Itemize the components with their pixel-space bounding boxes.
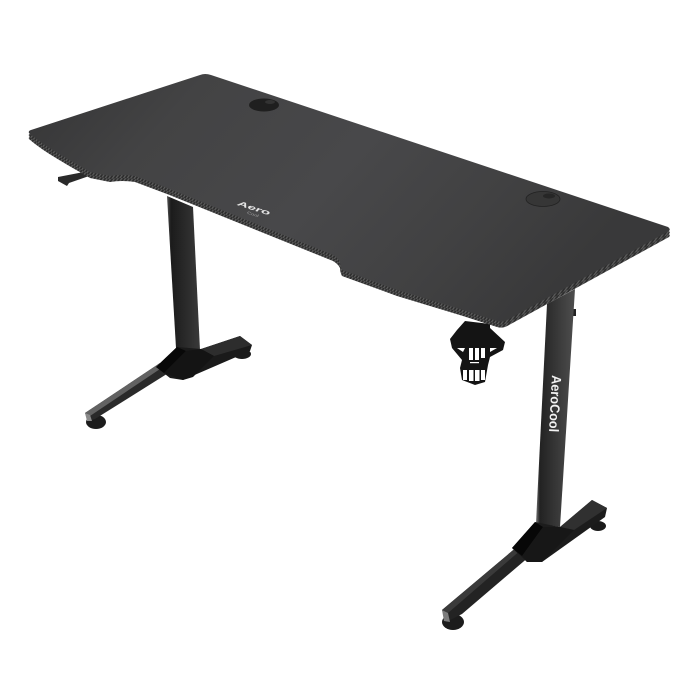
adjustment handle — [58, 171, 92, 186]
left rear foot pad — [233, 349, 251, 359]
carbon fibre edge — [29, 77, 670, 328]
cup holder gaps — [457, 348, 497, 381]
left upright column — [167, 196, 200, 350]
top surface — [29, 74, 670, 322]
cup holder — [450, 321, 505, 385]
right base rod — [442, 546, 530, 622]
right rear foot pad — [590, 521, 606, 531]
left base rod — [85, 363, 170, 421]
right cable grommet — [526, 192, 560, 206]
left front foot pad — [86, 415, 106, 429]
desk top — [29, 74, 670, 328]
right base housing — [512, 500, 607, 562]
leg brand label: AeroCool — [546, 375, 564, 433]
desk logo: Cool — [247, 211, 260, 218]
desk logo — [233, 200, 272, 222]
left leg and base — [85, 196, 252, 429]
right leg and base — [442, 289, 607, 630]
desk logo: Aero — [234, 200, 272, 218]
left cable grommet — [249, 98, 279, 112]
height button — [573, 309, 576, 316]
right front foot pad — [442, 614, 464, 630]
right upright column — [536, 289, 575, 527]
left base housing — [156, 336, 252, 380]
